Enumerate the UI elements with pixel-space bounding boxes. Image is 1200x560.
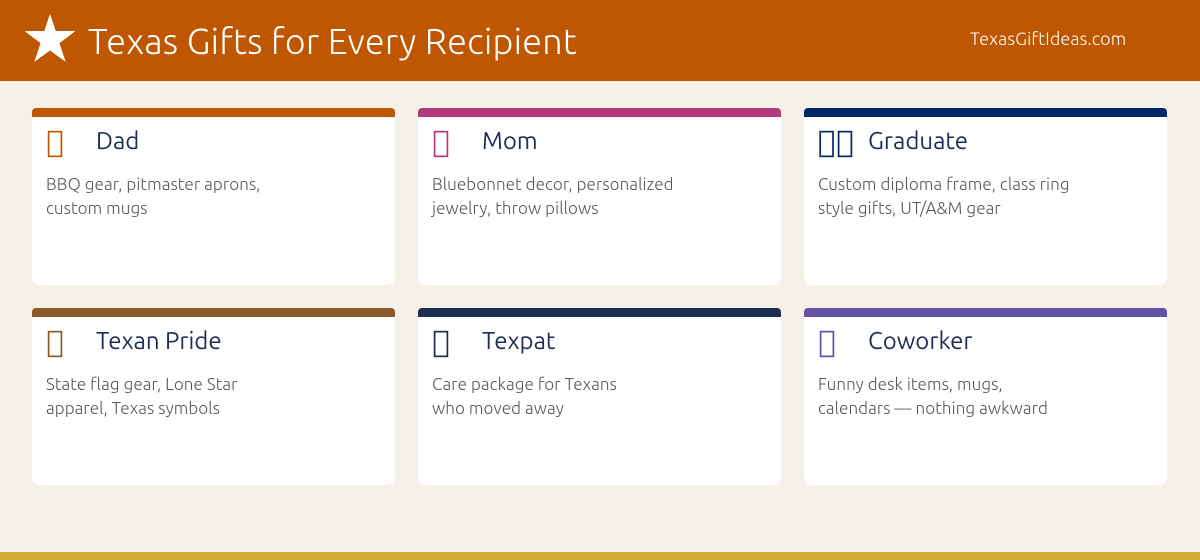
text: Mom: Bluebonnet decor, personalized bbox=[432, 175, 674, 194]
title: Texas Gifts for Every Recipient bbox=[88, 20, 577, 61]
icon: Texpat bbox=[434, 330, 448, 358]
text: Graduate: style gifts, UT/A&M gear bbox=[818, 199, 1001, 218]
text: Texpat: Care package for Texans bbox=[432, 375, 617, 394]
panel: Graduate bbox=[804, 108, 1167, 285]
icon: star bbox=[25, 14, 75, 62]
text: Graduate: Custom diploma frame, class ring bbox=[818, 175, 1070, 194]
panel: Texpat bbox=[418, 308, 781, 485]
text: Dad bbox=[46, 175, 260, 218]
panel: Texan Pride bbox=[32, 308, 395, 485]
text: Texan Pride: apparel, Texas symbols bbox=[46, 399, 220, 418]
text: Graduate bbox=[818, 175, 1070, 218]
icon: Dad bbox=[48, 130, 62, 158]
website: TexasGiftIdeas.com bbox=[970, 29, 1126, 49]
text: Texan Pride bbox=[46, 375, 238, 418]
text: Dad: BBQ gear, pitmaster aprons, bbox=[46, 175, 260, 194]
header banner bbox=[0, 0, 1200, 81]
icon: Texan Pride bbox=[48, 330, 62, 358]
panel: Coworker bbox=[804, 308, 1167, 485]
text: Mom: jewelry, throw pillows bbox=[432, 199, 599, 218]
icon: Coworker bbox=[820, 330, 834, 358]
text: Coworker: Funny desk items, mugs, bbox=[818, 375, 1003, 394]
panel: Mom bbox=[418, 108, 781, 285]
text: Coworker bbox=[818, 375, 1048, 418]
icon: Graduate bbox=[819, 130, 852, 158]
heading: Dad: Dad bbox=[96, 127, 139, 154]
text: Texan Pride: State flag gear, Lone Star bbox=[46, 375, 238, 394]
heading: Coworker: Coworker bbox=[868, 327, 972, 354]
heading: Texan Pride: Texan Pride bbox=[96, 327, 222, 354]
heading: Mom: Mom bbox=[482, 127, 538, 154]
panel: Dad bbox=[32, 108, 395, 285]
heading: Texpat: Texpat bbox=[482, 327, 555, 354]
icon: Mom bbox=[434, 130, 448, 158]
footer bar bbox=[0, 552, 1200, 560]
text: Coworker: calendars — nothing awkward bbox=[818, 399, 1048, 418]
heading: Graduate: Graduate bbox=[868, 127, 968, 154]
text: Dad: custom mugs bbox=[46, 199, 148, 218]
text: Texpat: who moved away bbox=[432, 399, 564, 418]
text: Texpat bbox=[432, 375, 617, 418]
text: Mom bbox=[430, 175, 674, 218]
